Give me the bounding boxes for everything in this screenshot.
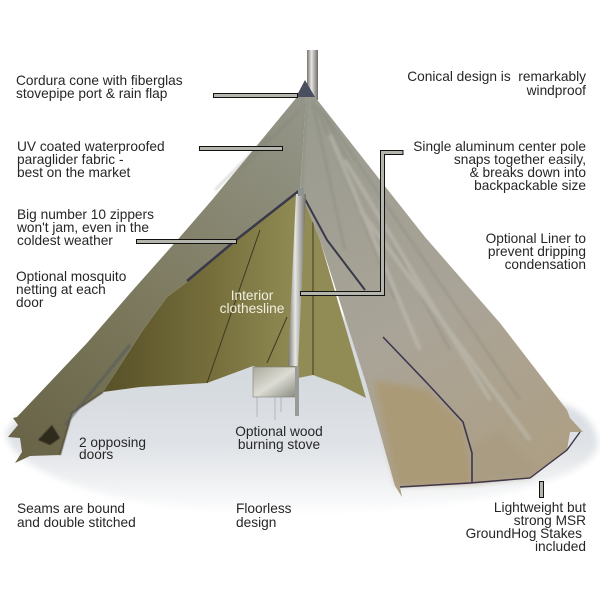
label: stakes: GroundHog Stakes bbox=[466, 526, 582, 541]
label: doors: doors bbox=[79, 447, 113, 462]
label: liner: Optional Liner to bbox=[486, 231, 586, 246]
label: center pole: snaps together easily, bbox=[454, 152, 586, 167]
icon: wood stove bbox=[253, 366, 299, 420]
label: mosquito netting: Optional mosquito bbox=[16, 269, 126, 284]
label: center pole: backpackable size bbox=[474, 178, 586, 193]
label: floorless: design bbox=[236, 515, 276, 530]
label: zippers: coldest weather bbox=[17, 233, 113, 248]
label: windproof: Conical design is remarkably bbox=[407, 69, 586, 84]
callout line: fabric bbox=[200, 146, 282, 150]
callout line: center pole bbox=[300, 150, 403, 296]
label: cone: Cordura cone with fiberglas bbox=[16, 73, 183, 88]
fabric folds bbox=[215, 100, 530, 440]
right tent panel bbox=[300, 97, 583, 497]
left tent panel bbox=[8, 97, 306, 463]
label: stakes: strong MSR bbox=[514, 513, 586, 528]
label: liner: prevent dripping bbox=[488, 244, 586, 259]
callout line: stakes bbox=[540, 482, 544, 498]
label: fabric: best on the market bbox=[17, 165, 131, 180]
tent illustration bbox=[8, 80, 583, 497]
label: stakes: included bbox=[535, 539, 586, 554]
label: fabric: paraglider fabric - bbox=[17, 152, 124, 167]
callout line: zippers bbox=[136, 240, 236, 244]
label: center pole: & breaks down into bbox=[470, 165, 586, 180]
label: mosquito netting: netting at each bbox=[16, 282, 106, 297]
label: seams: and double stitched bbox=[17, 515, 136, 530]
label: stakes: Lightweight but bbox=[494, 500, 586, 515]
callout line: cone bbox=[214, 94, 298, 98]
lower right flap bbox=[374, 380, 472, 485]
label: fabric: UV coated waterproofed bbox=[17, 139, 165, 154]
label: stove: burning stove bbox=[238, 437, 320, 452]
cone with stovepipe port bbox=[296, 80, 315, 97]
center pole bbox=[288, 194, 306, 366]
label: zippers: Big number 10 zippers bbox=[17, 207, 154, 222]
label: doors: 2 opposing bbox=[79, 435, 146, 450]
label: mosquito netting: door bbox=[16, 295, 44, 310]
label: windproof: windproof bbox=[526, 83, 586, 98]
label: clothesline: Interior bbox=[231, 288, 273, 303]
label: cone: stovepipe port & rain flap bbox=[16, 86, 168, 101]
tent interior liner bbox=[103, 190, 366, 398]
pole bracket bbox=[298, 188, 304, 196]
label: clothesline: clothesline bbox=[220, 301, 284, 316]
label: floorless: Floorless bbox=[236, 501, 292, 516]
label: center pole: Single aluminum center pole bbox=[413, 139, 586, 154]
label: zippers: won't jam, even in the bbox=[16, 220, 149, 235]
stovepipe bbox=[307, 50, 318, 100]
door zippers bbox=[187, 190, 300, 281]
lower left flap bbox=[38, 345, 130, 455]
label: stove: Optional wood bbox=[235, 424, 323, 439]
label: liner: condensation bbox=[505, 257, 586, 272]
ground shadow bbox=[6, 300, 598, 514]
label: seams: Seams are bound bbox=[17, 501, 125, 516]
